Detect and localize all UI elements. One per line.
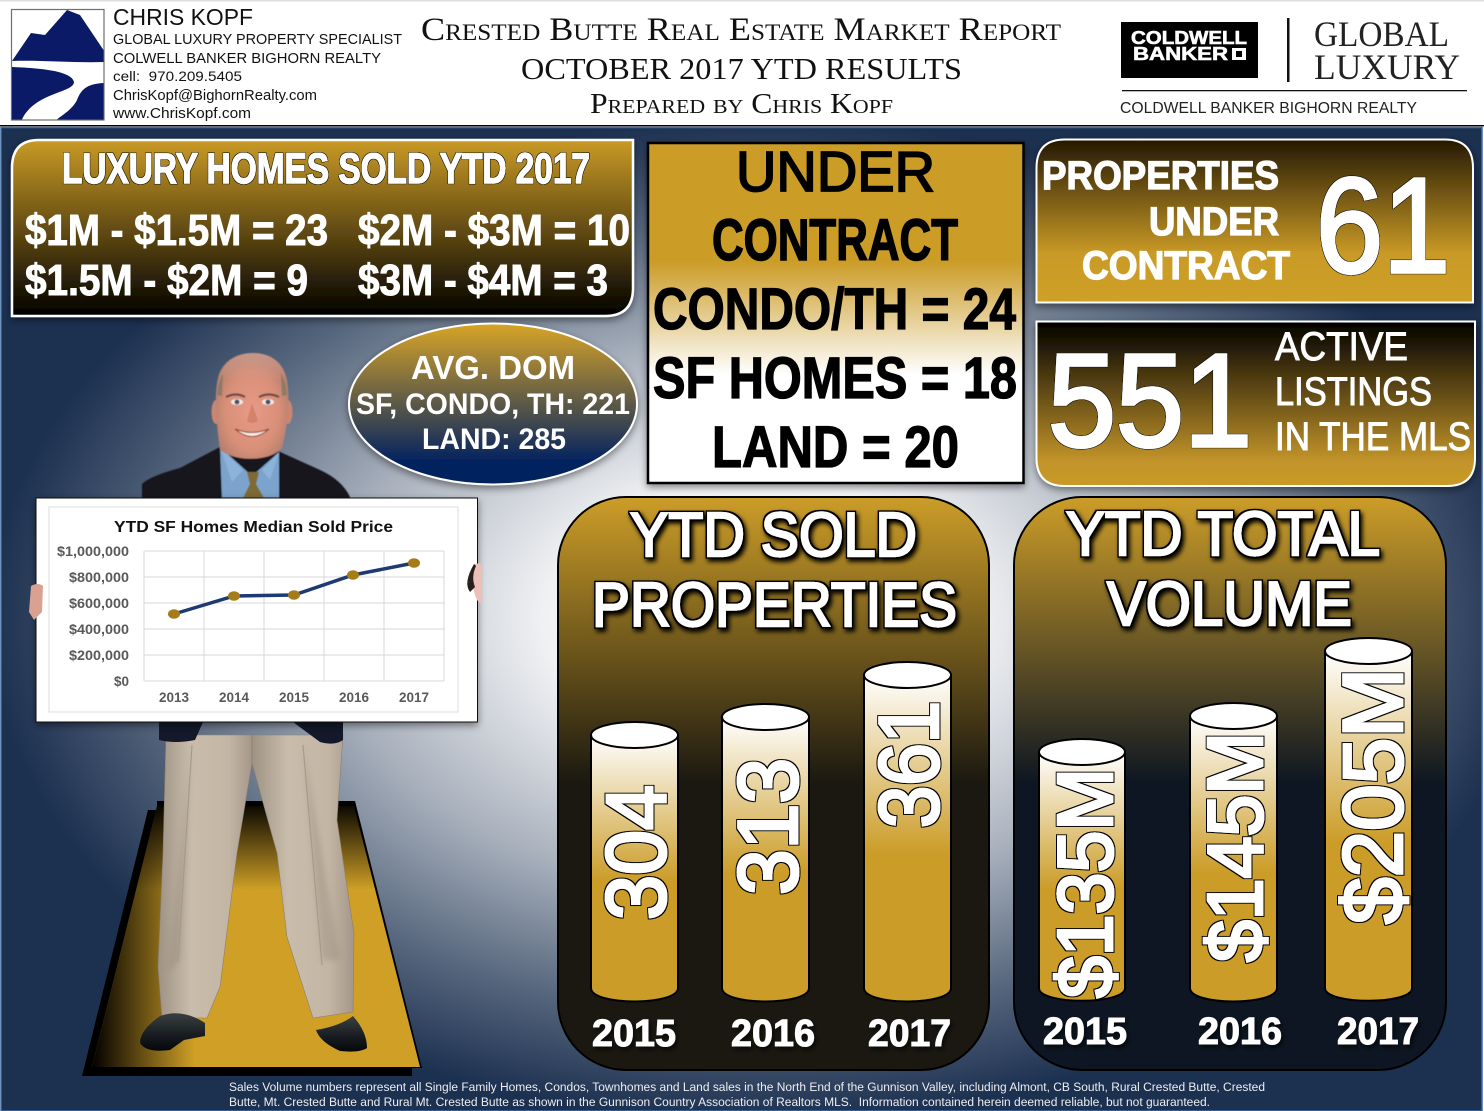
- brokerage logo: Coldwell Banker Global Luxury: LUXURY: [1314, 47, 1460, 87]
- heading: luxury homes sold: LUXURY HOMES SOLD YTD 2017: [62, 145, 590, 193]
- year labels: sold: [592, 1013, 951, 1055]
- label: properties under contract: PROPERTIES: [1042, 154, 1279, 198]
- agent contact text: GLOBAL LUXURY PROPERTY SPECIALIST: [113, 32, 402, 48]
- bar: 2016 sold 313: [721, 704, 815, 1002]
- year labels: sold: 2016: [731, 1013, 815, 1055]
- panel: properties under contract 61: [1036, 140, 1473, 302]
- agent right shoe: [316, 1016, 367, 1052]
- callout: average days on market: AVG. DOM: [411, 349, 575, 386]
- year labels: sold: 2015: [592, 1013, 676, 1055]
- panel: YTD sold properties: [558, 497, 989, 1070]
- agent right hand: [467, 563, 481, 604]
- year labels: volume: 2017: [1337, 1011, 1419, 1053]
- agent contact text: cell: 970.209.5405: [113, 68, 242, 84]
- heading: under contract: UNDER: [736, 140, 935, 204]
- chart x axis labels: 2013: [159, 690, 190, 705]
- heading: YTD sold properties: [592, 501, 957, 640]
- bar: 2016 sold 313: 313: [721, 758, 815, 895]
- brokerage logo: Coldwell Banker Global Luxury: COLDWELL: [1131, 28, 1247, 48]
- bar: 2016 volume $145M: $145M: [1191, 732, 1279, 962]
- label: properties under contract: CONTRACT: [1082, 244, 1290, 288]
- under contract counts: SF HOMES = 18: [653, 346, 1017, 411]
- label: active listings in the MLS: [1275, 325, 1471, 459]
- chart data line: [168, 558, 420, 619]
- number: 61: 61: [1316, 150, 1450, 301]
- report title: OCTOBER 2017 YTD RESULTS: [521, 51, 962, 86]
- bar: 2015 volume $135M: $135M: [1041, 768, 1129, 998]
- chart y axis labels: $1,000,000: [57, 544, 129, 559]
- heading: YTD sold properties: YTD SOLD: [630, 501, 917, 570]
- bar: 2015 sold 304: [589, 722, 683, 1002]
- bar: 2017 volume $205M: $205M: [1326, 668, 1420, 924]
- bar: 2017 sold 361: 361: [862, 701, 956, 828]
- agent contact text: www.ChrisKopf.com: [112, 105, 251, 122]
- chart x axis labels: 2014: [219, 690, 250, 705]
- callout: average days on market: LAND: 285: [422, 423, 566, 456]
- chart title: YTD SF Homes Median Sold Price: [114, 519, 393, 536]
- chart grid lines: [144, 551, 444, 681]
- under contract counts: CONDO/TH = 24: [653, 277, 1016, 342]
- chart y axis labels: [57, 544, 129, 689]
- heading: YTD total volume: [1066, 500, 1380, 639]
- heading: YTD sold properties: PROPERTIES: [592, 571, 957, 640]
- chart y axis labels: $200,000: [69, 648, 129, 663]
- chart x axis labels: 2015: [279, 690, 310, 705]
- brokerage logo: Coldwell Banker Global Luxury: BANKER: [1133, 44, 1228, 64]
- panel: luxury homes sold: [12, 140, 633, 316]
- agent left shoe: [140, 1013, 205, 1051]
- year labels: volume: 2015: [1043, 1011, 1127, 1053]
- panel: under contract breakdown: CONTRACT: [712, 208, 958, 273]
- agent contact text: [112, 4, 402, 122]
- floor platform: [82, 801, 422, 1076]
- header band: [0, 0, 1484, 126]
- label: properties under contract: [1042, 154, 1290, 288]
- agent contact text: ChrisKopf@BighornRealty.com: [113, 87, 317, 104]
- footer disclaimer: Butte, Mt. Crested Butte and Rural Mt. Crested Butte as shown in the Gunnison Country Association of Realtors MLS. Information contained herein deemed reliable, but not guaranteed.: [229, 1095, 1210, 1109]
- bar: 2015 sold 304: 304: [589, 785, 683, 920]
- agent jacket hem: [159, 720, 343, 744]
- heading: YTD total volume: YTD TOTAL: [1066, 500, 1380, 569]
- footer disclaimer: [229, 1080, 1265, 1109]
- brokerage logo: Coldwell Banker Global Luxury: [1120, 14, 1467, 117]
- chart y axis labels: $800,000: [69, 570, 129, 585]
- panel: under contract breakdown: [648, 140, 1024, 483]
- year labels: volume: 2016: [1198, 1011, 1282, 1053]
- luxury price ranges: [25, 206, 630, 305]
- brokerage logo: Coldwell Banker Global Luxury: COLDWELL BANKER BIGHORN REALTY: [1120, 100, 1417, 117]
- chart y axis labels: $600,000: [69, 596, 129, 611]
- luxury price ranges: $1M - $1.5M = 23: [25, 206, 328, 255]
- under contract counts: [653, 277, 1017, 480]
- callout: average days on market: SF, CONDO, TH: 221: [356, 388, 630, 421]
- bar: 2017 sold 361: [862, 662, 956, 1002]
- heading: YTD total volume: VOLUME: [1107, 570, 1352, 639]
- year labels: volume: [1043, 1011, 1419, 1053]
- luxury price ranges: $3M - $4M = 3: [358, 256, 608, 305]
- report title: [421, 12, 1061, 120]
- sign board: median sold price chart: [36, 498, 478, 722]
- logo: mountain and river: [12, 10, 104, 120]
- luxury price ranges: $2M - $3M = 10: [358, 206, 630, 255]
- brokerage logo: Coldwell Banker Global Luxury: GLOBAL: [1314, 14, 1449, 54]
- agent photo figure: [140, 353, 367, 1052]
- panel: active listings 551: [1036, 322, 1475, 486]
- chart y axis labels: $0: [114, 674, 129, 689]
- chart y axis labels: $400,000: [69, 622, 129, 637]
- number: 551: 551: [1048, 327, 1252, 474]
- luxury price ranges: $1.5M - $2M = 9: [25, 256, 308, 305]
- agent pants: [158, 735, 354, 1018]
- agent contact text: CHRIS KOPF: [113, 4, 253, 30]
- agent left hand: [29, 584, 43, 620]
- chart x axis labels: 2017: [399, 690, 429, 705]
- report title: Crested Butte Real Estate Market Report: [421, 12, 1061, 48]
- agent head and shoulders: [142, 353, 350, 500]
- report title: Prepared by Chris Kopf: [590, 88, 893, 120]
- agent contact text: COLWELL BANKER BIGHORN REALTY: [113, 51, 381, 67]
- label: properties under contract: UNDER: [1149, 200, 1279, 244]
- chart x axis labels: 2016: [339, 690, 370, 705]
- callout: average days on market: [349, 324, 637, 484]
- footer disclaimer: Sales Volume numbers represent all Single Family Homes, Condos, Townhomes and Land sales in the North End of the Gunnison Valley, including Almont, CB South, Rural Crested Butte, Crested: [229, 1080, 1265, 1094]
- label: active listings in the MLS: LISTINGS: [1275, 370, 1432, 414]
- under contract counts: LAND = 20: [712, 415, 959, 480]
- label: active listings in the MLS: ACTIVE: [1275, 325, 1408, 369]
- year labels: sold: 2017: [868, 1013, 951, 1055]
- chart x axis labels: [159, 690, 429, 705]
- panel: YTD total volume: [1014, 497, 1446, 1070]
